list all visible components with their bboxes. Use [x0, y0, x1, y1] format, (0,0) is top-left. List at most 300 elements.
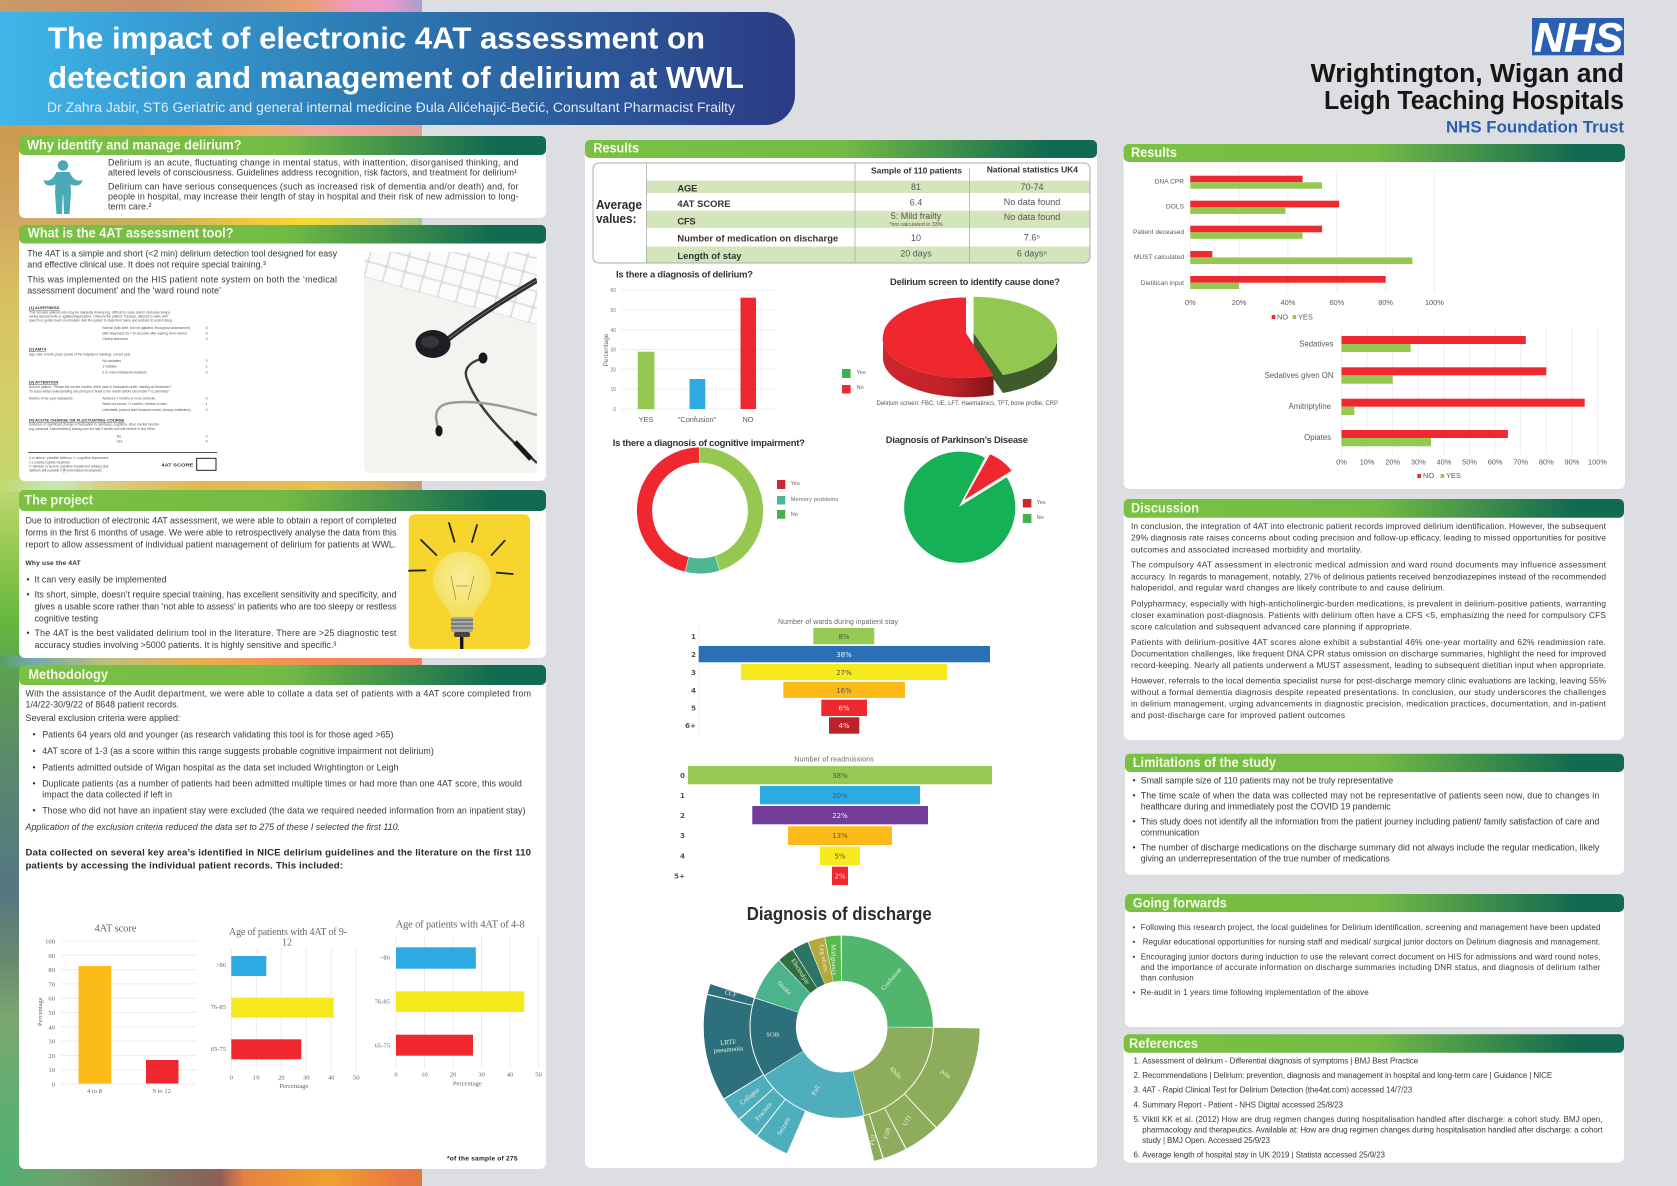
bar chart: documentation: Dietitican input — [1141, 280, 1184, 287]
bar chart: documentation: 60% — [1329, 298, 1345, 307]
table: average values: No data found — [1004, 197, 1060, 207]
bar chart: age of patients with 4AT of 9-12: 76-85 — [211, 1004, 227, 1011]
bar chart: diagnosis of delirium: 10 — [610, 387, 616, 393]
sunburst chart: diagnosis of discharge: Leg ulcers — [817, 944, 829, 973]
funnel chart: number of readmissions: 13% — [832, 832, 848, 840]
4AT form: Untestable (cannot start because unwell, drowsy, inattentive) — [102, 408, 191, 412]
bar chart: medications: Sedatives given ON — [1265, 371, 1334, 380]
4AT form: Evidence of significant change or fluctuation in: alertness, cognition, other mental function — [29, 423, 159, 427]
funnel chart: number of wards: 4 — [691, 686, 696, 695]
table: average values: Sample of 110 patients — [871, 165, 962, 175]
pie chart: Parkinson's disease — [886, 434, 1046, 563]
bar chart: documentation: NO — [1277, 312, 1288, 322]
funnel chart: number of wards: 38% — [836, 651, 852, 659]
text: methodology description: Application of the exclusion criteria reduced the data set to 275 of these I selected the first 110. — [24, 822, 400, 832]
bar chart: diagnosis of delirium — [603, 269, 776, 424]
bar chart: age of patients with 4AT of 4-8: 40 — [507, 1071, 514, 1078]
bar chart: medications: 60% — [1488, 457, 1503, 466]
table: average values: 6.4 — [910, 197, 922, 207]
text: 4AT description: The 4AT is a simple and short (<2 min) delirium detection tool designed for easy — [27, 249, 338, 259]
text: project description: gives a usable score rather than ‘not able to assess’ in patients who are too sleepy or restless — [34, 602, 397, 612]
footnote: sample of 275: *of the sample of 275 — [447, 1156, 518, 1163]
funnel chart: number of wards: 5 — [691, 704, 696, 712]
bar chart: medications: 80% — [1539, 457, 1554, 466]
bar chart: age of patients with 4AT of 4-8: >86 — [380, 954, 391, 961]
pie chart: Parkinson's disease: Yes — [1037, 500, 1046, 506]
bar chart: medications: YES — [1446, 471, 1461, 480]
bar chart: age of patients with 4AT of 9-12: 65-75 — [211, 1046, 227, 1053]
text: discussion: In conclusion, the integration of 4AT into electronic patient records improved delirium identification. However, the subsequent — [1131, 521, 1607, 531]
text: methodology description: Patients admitted outside of Wigan hospital as the data set included Wrightington or Leigh — [42, 762, 399, 772]
text: discussion: 29% diagnosis rate raises concerns about coding precision and follow-up efficacy, leading to missed opportunities for positive — [1131, 533, 1606, 543]
bar chart: 4AT score: 40 — [48, 1024, 56, 1031]
4AT form: 0 — [206, 434, 208, 438]
bar chart: medications: Amitriptyline — [1289, 402, 1331, 411]
bar chart: diagnosis of delirium: 0 — [613, 407, 616, 413]
funnel chart: number of readmissions: 5% — [834, 852, 846, 860]
bar chart: age of patients with 4AT of 4-8: 65-75 — [375, 1042, 391, 1049]
4AT form: To assist initial understanding one prompt of “what is the month before December?” is permitted — [29, 389, 169, 393]
panel: why identify and manage delirium — [19, 136, 546, 218]
4AT form: during assessment) or agitated/hyperactive. Observe the patient. If asleep, attempt to wake with — [29, 314, 168, 318]
donut chart: cognitive impairment: Is there a diagnosis of cognitive impairment? — [613, 437, 805, 448]
bar chart: age of patients with 4AT of 9-12: 10 — [253, 1074, 260, 1081]
heading: going forwards: Going forwards — [1133, 896, 1227, 910]
funnel chart: number of readmissions: 38% — [832, 772, 848, 780]
4AT form: Yes — [117, 440, 123, 444]
text: project description: accuracy studies involving >5000 patients. It is highly sensitive and specific.³ — [34, 640, 336, 650]
heading: results — [585, 140, 1097, 158]
pie chart: delirium screen: No — [856, 385, 864, 391]
4AT form: 4 — [206, 337, 208, 341]
panel: the project — [19, 490, 546, 658]
text: methodology description: Those who did not have an inpatient stay were excluded (the data we required needed information from an inpatient stay) — [42, 806, 526, 816]
sunburst chart: diagnosis of discharge: PUI — [869, 1134, 878, 1146]
text: methodology description: Several exclusion criteria were applied: — [26, 713, 180, 723]
text: limitations — [1132, 775, 1600, 864]
funnel chart: number of readmissions: 4 — [680, 852, 685, 860]
text: discussion: haloperidol, and regular ward changes are likely contribute to and cause delirium. — [1131, 583, 1445, 593]
funnel chart: number of readmissions — [674, 757, 992, 885]
heading: the project: The project — [24, 492, 94, 508]
bar chart: documentation: DOLS — [1166, 204, 1185, 210]
bar chart: medications: 20% — [1385, 457, 1401, 466]
table: average values: Number of medication on discharge — [677, 233, 838, 244]
table: average values: 7.6⁵ — [1024, 232, 1040, 242]
heading: limitations — [1125, 754, 1624, 772]
4AT form: 4 or above: possible delirium +/- cognitive impairment — [29, 456, 108, 460]
icon: person shrugging — [44, 160, 82, 214]
4AT form: 4AT SCORE — [161, 463, 194, 469]
funnel chart: number of readmissions: 22% — [832, 812, 848, 820]
bar chart: 4AT score: 30 — [48, 1039, 56, 1046]
text: delirium description: Delirium is an acute, fluctuating change in mental status, with inattention, disorganised thinking, and — [108, 157, 519, 167]
4AT form: Starts but scores <7 months / refuses to start — [102, 402, 167, 406]
photo: keyboard and stethoscope — [364, 252, 537, 473]
bar chart: diagnosis of delirium: NO — [742, 415, 754, 424]
bar chart: age of patients with 4AT of 9-12: Percentage — [279, 1083, 308, 1090]
text: going forwards: Regular educational opportunities for nursing staff and medical/ surgical junior doctors on Delirium diagnosis and management. — [1143, 938, 1600, 947]
sunburst chart: diagnosis of discharge: SOB — [766, 1032, 780, 1038]
4AT form: Clearly abnormal — [102, 337, 128, 341]
bar chart: 4AT score: 4AT score — [94, 924, 137, 935]
bar chart: age of patients with 4AT of 4-8: Age of patients with 4AT of 4-8 — [396, 919, 525, 930]
sunburst chart: diagnosis of discharge: LRTI/ — [720, 1038, 737, 1047]
panel: limitations of the study — [1125, 754, 1624, 875]
bar chart: age of patients with 4AT of 9-12: Age of patients with 4AT of 9- — [229, 927, 347, 938]
text: methodology description: • — [32, 762, 36, 772]
4AT form: 0 — [206, 397, 208, 401]
text: methodology description: Data collected on several key area’s identified in NICE delirium guidelines and the literature on the first 110 — [26, 847, 531, 858]
text: reference list: 2. — [1134, 1071, 1140, 1080]
table: average values: 4AT SCORE — [677, 198, 730, 209]
text: reference list: study | BMJ Open. Accessed 25/9/23 — [1142, 1136, 1271, 1145]
4AT form: 2 or more mistakes/untestable — [102, 370, 147, 374]
heading: going forwards — [1125, 894, 1624, 912]
4AT form: No mistakes — [102, 359, 121, 363]
4AT form: This includes patients who may be markedly drowsy (eg. difficult to rouse and/or obviously sleepy — [29, 310, 170, 314]
text: methodology description: Duplicate patients (as a number of patients had been admitted multiple times or had more than one 4AT score, this would — [42, 779, 522, 789]
text: going forwards: • — [1132, 988, 1136, 997]
4AT form: 0 — [206, 331, 208, 335]
text: project description: It can very easily be implemented — [34, 575, 167, 585]
bar chart: age of patients with 4AT of 9-12: >86 — [216, 962, 227, 969]
bar chart: age of patients with 4AT of 9-12: 0 — [230, 1074, 234, 1081]
bar chart: medications: 90% — [1565, 457, 1580, 466]
text: going forwards: Re-audit in 1 years time following implementation of the above — [1141, 988, 1369, 997]
text: going forwards: • — [1132, 938, 1136, 947]
bar chart: documentation: 100% — [1425, 298, 1444, 307]
text: methodology description: impact the data collected if left in — [42, 790, 172, 800]
text: project description: The 4AT is the best validated delirium tool in the literature. There are >25 diagnostic test — [34, 628, 397, 638]
4AT form: 2 — [206, 370, 208, 374]
heading: 4AT tool: What is the 4AT assessment tool? — [28, 226, 233, 240]
bar chart: documentation — [1133, 170, 1444, 322]
funnel chart: number of wards: 1 — [691, 632, 696, 641]
text: methodology description: 1/4/22-30/9/22 of 8648 patient records. — [26, 699, 179, 709]
heading: discussion: Discussion — [1131, 500, 1199, 516]
title banner — [0, 12, 795, 125]
bar chart: 4AT score: 9 to 12 — [153, 1088, 171, 1095]
panel: references — [1124, 1034, 1624, 1163]
funnel chart: number of readmissions: Number of readmissions — [794, 757, 874, 764]
bar chart: documentation: YES — [1298, 312, 1313, 322]
table: average values: 70-74 — [1020, 182, 1044, 192]
pie chart: Parkinson's disease: No — [1037, 515, 1044, 521]
funnel chart: number of readmissions: 3 — [680, 831, 685, 840]
sunburst chart: diagnosis of discharge: pneumonia — [713, 1045, 743, 1055]
panel: what is the 4AT assessment tool — [19, 225, 546, 481]
text: limitations: • — [1132, 791, 1136, 801]
table: average values: No data found — [1004, 212, 1060, 222]
funnel chart: number of wards: 16% — [836, 687, 852, 695]
heading: results — [1124, 144, 1625, 162]
heading: methodology: Methodology — [28, 667, 109, 682]
heading: methodology — [19, 665, 546, 685]
text: methodology description: • — [32, 746, 36, 756]
bar chart: documentation: 40% — [1281, 298, 1296, 307]
text: reference list: Viktil KK et al. (2012) How are drug regmen changes during hospitalisation handled after discharge: a cohort study. BMJ open, — [1142, 1115, 1603, 1124]
sunburst chart: diagnosis of discharge: GIB — [883, 1126, 893, 1140]
text: methodology description: 4AT score of 1-3 (as a score within this range suggests probable cognitive impairment not delirium) — [42, 746, 434, 756]
bar chart: age of patients with 4AT of 4-8 — [375, 919, 542, 1088]
text: project description: • — [26, 575, 30, 585]
pie chart: delirium screen: Delirium screen to identify cause done? — [890, 276, 1060, 287]
bar chart: diagnosis of delirium: 60 — [610, 288, 616, 294]
bar chart: age of patients with 4AT of 4-8: Percentage — [453, 1081, 482, 1088]
text: methodology description: With the assistance of the Audit department, we were able to collate a data set of patients with a 4AT score completed from — [26, 689, 531, 699]
text: discussion: Documentation challenges, like frequent DNA CPR status omission on discharge summaries, highlight the need for improved — [1131, 649, 1606, 659]
4AT form: [4] ACUTE CHANGE OR FLUCTUATING COURSE — [29, 418, 125, 422]
bar chart: age of patients with 4AT of 4-8: 76-85 — [375, 998, 391, 1005]
4AT form: Ask the patient: “Please tell me the months of the year in backwards order, starting at December.” — [29, 385, 172, 389]
colourful background strips — [0, 0, 422, 1186]
bar chart: age of patients with 4AT of 9-12: 40 — [328, 1074, 335, 1081]
table: average values: 20 days — [900, 249, 932, 259]
4AT form: 1 — [206, 402, 208, 406]
sunburst chart: diagnosis of discharge: Seizure — [776, 1116, 792, 1137]
text: discussion: score calculation and subsequent advanced care planning if appropriate. — [1131, 621, 1412, 631]
4AT form: 2 — [206, 408, 208, 412]
text: reference list: Average length of hospital stay in UK 2019 | Statista accessed 25/9/23 — [1142, 1151, 1386, 1160]
pie chart: delirium screen: Yes — [856, 370, 866, 376]
funnel chart: number of wards: 2 — [691, 650, 696, 659]
pie chart: Parkinson's disease: Diagnosis of Parkinson’s Disease — [886, 434, 1028, 445]
4AT form: 0 — [206, 359, 208, 363]
text: methodology description: • — [32, 779, 36, 789]
funnel chart: number of wards: 4% — [838, 722, 850, 730]
4AT form: 4 — [206, 440, 208, 444]
bar chart: age of patients with 4AT of 4-8: 30 — [478, 1071, 486, 1078]
funnel chart: number of readmissions: 20% — [832, 792, 848, 800]
bar chart: age of patients with 4AT of 9-12: 12 — [282, 938, 292, 949]
text: limitations: This study does not identify all the information from the patient journey including patient/ family satisfaction of care and — [1141, 817, 1599, 827]
panel: results centre — [585, 140, 1097, 1168]
text: discussion: and post-discharge care for improved patient outcomes — [1131, 710, 1345, 720]
bar chart: 4AT score — [37, 924, 196, 1095]
funnel chart: number of readmissions: 0 — [680, 771, 685, 780]
pie chart: delirium screen: Delirium screen: FBC, UE, LFT, Haematinics, TFT, bone profile, CRP — [876, 401, 1058, 407]
text: methodology description: • — [32, 806, 36, 816]
sunburst chart: diagnosis of discharge: CCF — [724, 989, 738, 999]
sunburst chart: diagnosis of discharge: Collapse — [739, 1087, 761, 1107]
bar chart: age of patients with 4AT of 9-12 — [211, 927, 360, 1090]
bar chart: age of patients with 4AT of 4-8: 20 — [450, 1071, 457, 1078]
bar chart: documentation: 80% — [1378, 298, 1393, 307]
heading: references: References — [1129, 1036, 1198, 1051]
table: average values: CFS — [677, 215, 696, 226]
text: project description: Why use the 4AT — [26, 560, 81, 567]
bar chart: medications: Opiates — [1304, 433, 1331, 442]
table: average values: Average — [596, 198, 642, 212]
panel: discussion — [1124, 499, 1624, 740]
text: discussion: The compulsory 4AT assessment in electronic medical admission and ward round documents may influence assessment — [1131, 560, 1607, 570]
title banner: Dr Zahra Jabir, ST6 Geriatric and general internal medicine Đula Alićehajić-Bečić, Consultant Pharmacist Frailty — [47, 100, 736, 116]
text: discussion: outcomes and associated increased morbidity and mortality. — [1131, 544, 1362, 554]
bar chart: 4AT score: 20 — [48, 1053, 56, 1060]
donut chart: cognitive impairment: No — [791, 512, 798, 518]
sunburst chart: diagnosis of discharge: Diagnosis of discharge — [747, 904, 932, 924]
table: average values: 10 — [911, 233, 921, 243]
donut chart: cognitive impairment — [613, 437, 838, 566]
sunburst chart: diagnosis of discharge: Abdo — [887, 1065, 903, 1081]
4AT form: 1 — [206, 364, 208, 368]
text: methodology description: patients by accessing the individual patient records. This included: — [26, 861, 343, 872]
bar chart: documentation: Patient deceased — [1133, 229, 1184, 236]
text: delirium description: altered levels of consciousness. Guidelines address recognition, risk factors, and treatment for delirium¹ — [108, 167, 517, 177]
table: average values: 81 — [911, 182, 921, 192]
bar chart: 4AT score: 70 — [48, 981, 56, 988]
4AT form: delirium still possible if [4] information incomplete) — [29, 468, 102, 472]
heading: limitations: Limitations of the study — [1133, 755, 1277, 770]
text: limitations: Small sample size of 110 patients may not be truly representative — [1141, 775, 1393, 785]
bar chart: diagnosis of delirium: 40 — [610, 328, 616, 334]
text: methodology description — [24, 689, 531, 872]
panel: going forwards — [1125, 894, 1624, 1027]
bar chart: age of patients with 4AT of 4-8: 0 — [394, 1071, 398, 1078]
text: limitations: healthcare during and immediately post the COVID 19 pandemic — [1141, 801, 1391, 811]
sunburst chart: diagnosis of discharge: Electrolyte — [789, 958, 811, 986]
funnel chart: number of wards: 3 — [691, 668, 696, 677]
bar chart: 4AT score: Percentage — [37, 997, 44, 1026]
table: average values: Length of stay — [677, 250, 742, 261]
sunburst chart: diagnosis of discharge: Confusion — [880, 966, 904, 992]
text: limitations: The time scale of when the data was collected may not be representative of patients seen now, due to changes in — [1141, 791, 1599, 801]
bar chart: diagnosis of delirium: YES — [639, 415, 653, 424]
bar chart: medications: 0% — [1336, 457, 1347, 466]
text: project description — [26, 515, 397, 650]
heading: discussion — [1124, 499, 1624, 518]
bar chart: 4AT score: 10 — [48, 1067, 56, 1074]
text: discussion — [1130, 521, 1607, 720]
text: going forwards: and the importance of accurate information on discharge summaries including DNR status, and diagnosis of delirium rather — [1141, 963, 1601, 972]
donut chart: cognitive impairment: Memory problems — [791, 497, 838, 503]
bar chart: diagnosis of delirium: 30 — [610, 348, 616, 354]
bar chart: documentation: 20% — [1232, 298, 1247, 307]
bar chart: medications: 30% — [1411, 457, 1426, 466]
bar chart: medications: 100% — [1588, 457, 1607, 466]
bar chart: medications — [1265, 328, 1607, 480]
4AT form: [2] AMT4 — [29, 347, 47, 351]
text: 4AT description: and effective clinical use. It does not require special training.³ — [27, 260, 266, 270]
funnel chart: number of wards: Number of wards during inpatient stay — [778, 619, 898, 626]
4AT form: [3] ATTENTION — [29, 380, 59, 384]
text: limitations: The number of discharge medications on the discharge summary did not always include the regular medication, likely — [1141, 843, 1600, 853]
bar chart: documentation: DNA CPR — [1155, 178, 1184, 186]
text: discussion: record-keeping. Nearly all patients underwent a MUST assessment, leading to subsequent dietitian input when appropriate. — [1131, 660, 1606, 670]
text: delirium description: people in hospital, may increase their length of stay in hospital and their risk of new admission to long- — [108, 192, 519, 202]
text: reference list — [1134, 1056, 1603, 1160]
panel: methodology — [19, 665, 546, 1169]
title banner: detection and management of delirium at WWL — [48, 61, 744, 95]
text: project description: Due to introduction of electronic 4AT assessment, we were able to obtain a report of completed — [26, 515, 396, 525]
text: project description: cognitive testing — [34, 614, 98, 624]
text: going forwards: • — [1132, 952, 1136, 961]
text: methodology description: • — [32, 730, 36, 740]
text: 4AT description: assessment document’ and the ‘ward round note’ — [27, 286, 221, 296]
bar chart: medications: 40% — [1437, 457, 1452, 466]
heading: 4AT tool — [19, 225, 546, 244]
NHS logo and trust name: Leigh Teaching Hospitals — [1324, 87, 1624, 115]
table: average values: *not calculated in 33% — [889, 222, 943, 228]
funnel chart: number of wards: 6+ — [685, 721, 696, 730]
4AT form: Months of the year backwards — [29, 397, 73, 401]
text: reference list: 4AT - Rapid Clinical Test for Delirium Detection (the4at.com) accessed 14/7/23 — [1142, 1086, 1413, 1095]
text: discussion: accuracy. In regards to management, notably, 27% of delirious patients received benzodiazepines instead of the recommended — [1131, 571, 1606, 581]
sunburst chart: diagnosis of discharge: Fracture — [754, 1101, 774, 1122]
text: reference list: pharmacology and therapeutics. Available at: How are drug regimen changes during hospitalisation handled after discharge: a cohort — [1142, 1126, 1603, 1135]
text: going forwards: • — [1132, 923, 1136, 932]
text: limitations: • — [1132, 817, 1136, 827]
text: reference list: Assessment of delirium - Differential diagnosis of symptoms | BMJ Best Practice — [1142, 1056, 1419, 1065]
text: limitations: giving an underrepresentation of the true number of medications — [1141, 854, 1390, 864]
funnel chart: number of readmissions: 2 — [680, 811, 685, 820]
bar chart: 4AT score: 90 — [48, 953, 56, 960]
text: project description: Its short, simple, doesn’t require special training, has excellent sensitivity and specificity, and — [34, 590, 396, 600]
text: limitations: communication — [1141, 828, 1199, 838]
text: going forwards: Encouraging junior doctors during induction to use the relevant correct document on HIS for admissions and ward round notes, — [1141, 952, 1600, 961]
4AT form: 0 — [206, 326, 208, 330]
text: project description: • — [26, 590, 30, 600]
bar chart: age of patients with 4AT of 9-12: 30 — [303, 1074, 310, 1081]
table: average values: 6 days⁶ — [1017, 248, 1047, 258]
text: discussion: However, referrals to the local dementia specialist nurse for post-discharge memory clinic evaluations are lacking, leaving 55% — [1131, 676, 1607, 686]
table: average values: National statistics UK4 — [987, 165, 1078, 175]
text: reference list: 1. — [1134, 1056, 1140, 1065]
bar chart: 4AT score: 100 — [45, 938, 56, 946]
pie chart: delirium screen — [842, 276, 1060, 407]
sunburst chart: diagnosis of discharge: Malignancy — [829, 944, 837, 977]
sunburst chart: diagnosis of discharge: Stroke — [775, 980, 793, 997]
NHS logo and trust name: NHS Foundation Trust — [1446, 119, 1625, 137]
4AT form: Normal (fully alert, but not agitated, throughout assessment) — [102, 326, 190, 330]
image: light bulb — [409, 514, 530, 649]
heading: the project — [19, 490, 546, 511]
donut chart: cognitive impairment: Yes — [791, 481, 800, 487]
bar chart: diagnosis of delirium: 50 — [610, 308, 616, 314]
heading: results: Results — [1131, 145, 1177, 160]
text: discussion: in delirium management, urging advancements in diagnostic precision, medication practices, documentation, and in-patient — [1131, 698, 1607, 708]
bar chart: age of patients with 4AT of 4-8: 50 — [535, 1071, 542, 1078]
4AT form — [28, 306, 217, 472]
table: average values — [593, 163, 1090, 263]
4AT form: [1] ALERTNESS — [29, 306, 60, 310]
4AT form: Achieves 7 months or more correctly — [102, 397, 155, 401]
bar chart: age of patients with 4AT of 4-8: 10 — [421, 1071, 428, 1078]
text: project description: report to allow assessment of individual patient management of delirium for patients at WWL. — [26, 539, 396, 549]
4AT form: Age, date of birth, place (name of the hospital or building), current year. — [29, 352, 131, 356]
4AT form: 1 mistake — [102, 364, 117, 368]
bar chart: 4AT score: 4 to 8 — [87, 1088, 103, 1095]
text: discussion: without a formal dementia diagnosis despite repeated presentations. In conclusion, our study underscores the challenges — [1130, 687, 1606, 697]
sunburst chart: diagnosis of discharge — [713, 904, 957, 1146]
4AT form: speech or gentle touch on shoulder. Ask the patient to state their name and address to assist rating. — [29, 318, 173, 322]
bar chart: documentation: MUST calculated — [1134, 254, 1184, 261]
funnel chart: number of wards: 8% — [838, 633, 850, 641]
text: 4AT description: This was implemented on the HIS patient note system on both the ‘medical — [27, 275, 337, 285]
NHS logo and trust name — [1311, 14, 1625, 137]
text: limitations: • — [1132, 843, 1136, 853]
text: reference list: 4. — [1134, 1100, 1140, 1109]
text: delirium description — [108, 157, 519, 212]
title banner: The impact of electronic 4AT assessment on — [48, 22, 705, 56]
text: reference list: 5. — [1134, 1115, 1140, 1124]
heading: references — [1124, 1034, 1624, 1053]
table: average values: values: — [596, 212, 636, 226]
bar chart: 4AT score: 80 — [48, 967, 56, 974]
text: discussion: Patients with delirium-positive 4AT scores alone exhibit a substantial 46% one-year mortality and 62% readmission rate. — [1131, 637, 1606, 647]
4AT form: (eg. paranoia, hallucinations) arising over the last 2 weeks and still evident in last 24hrs — [29, 427, 155, 431]
